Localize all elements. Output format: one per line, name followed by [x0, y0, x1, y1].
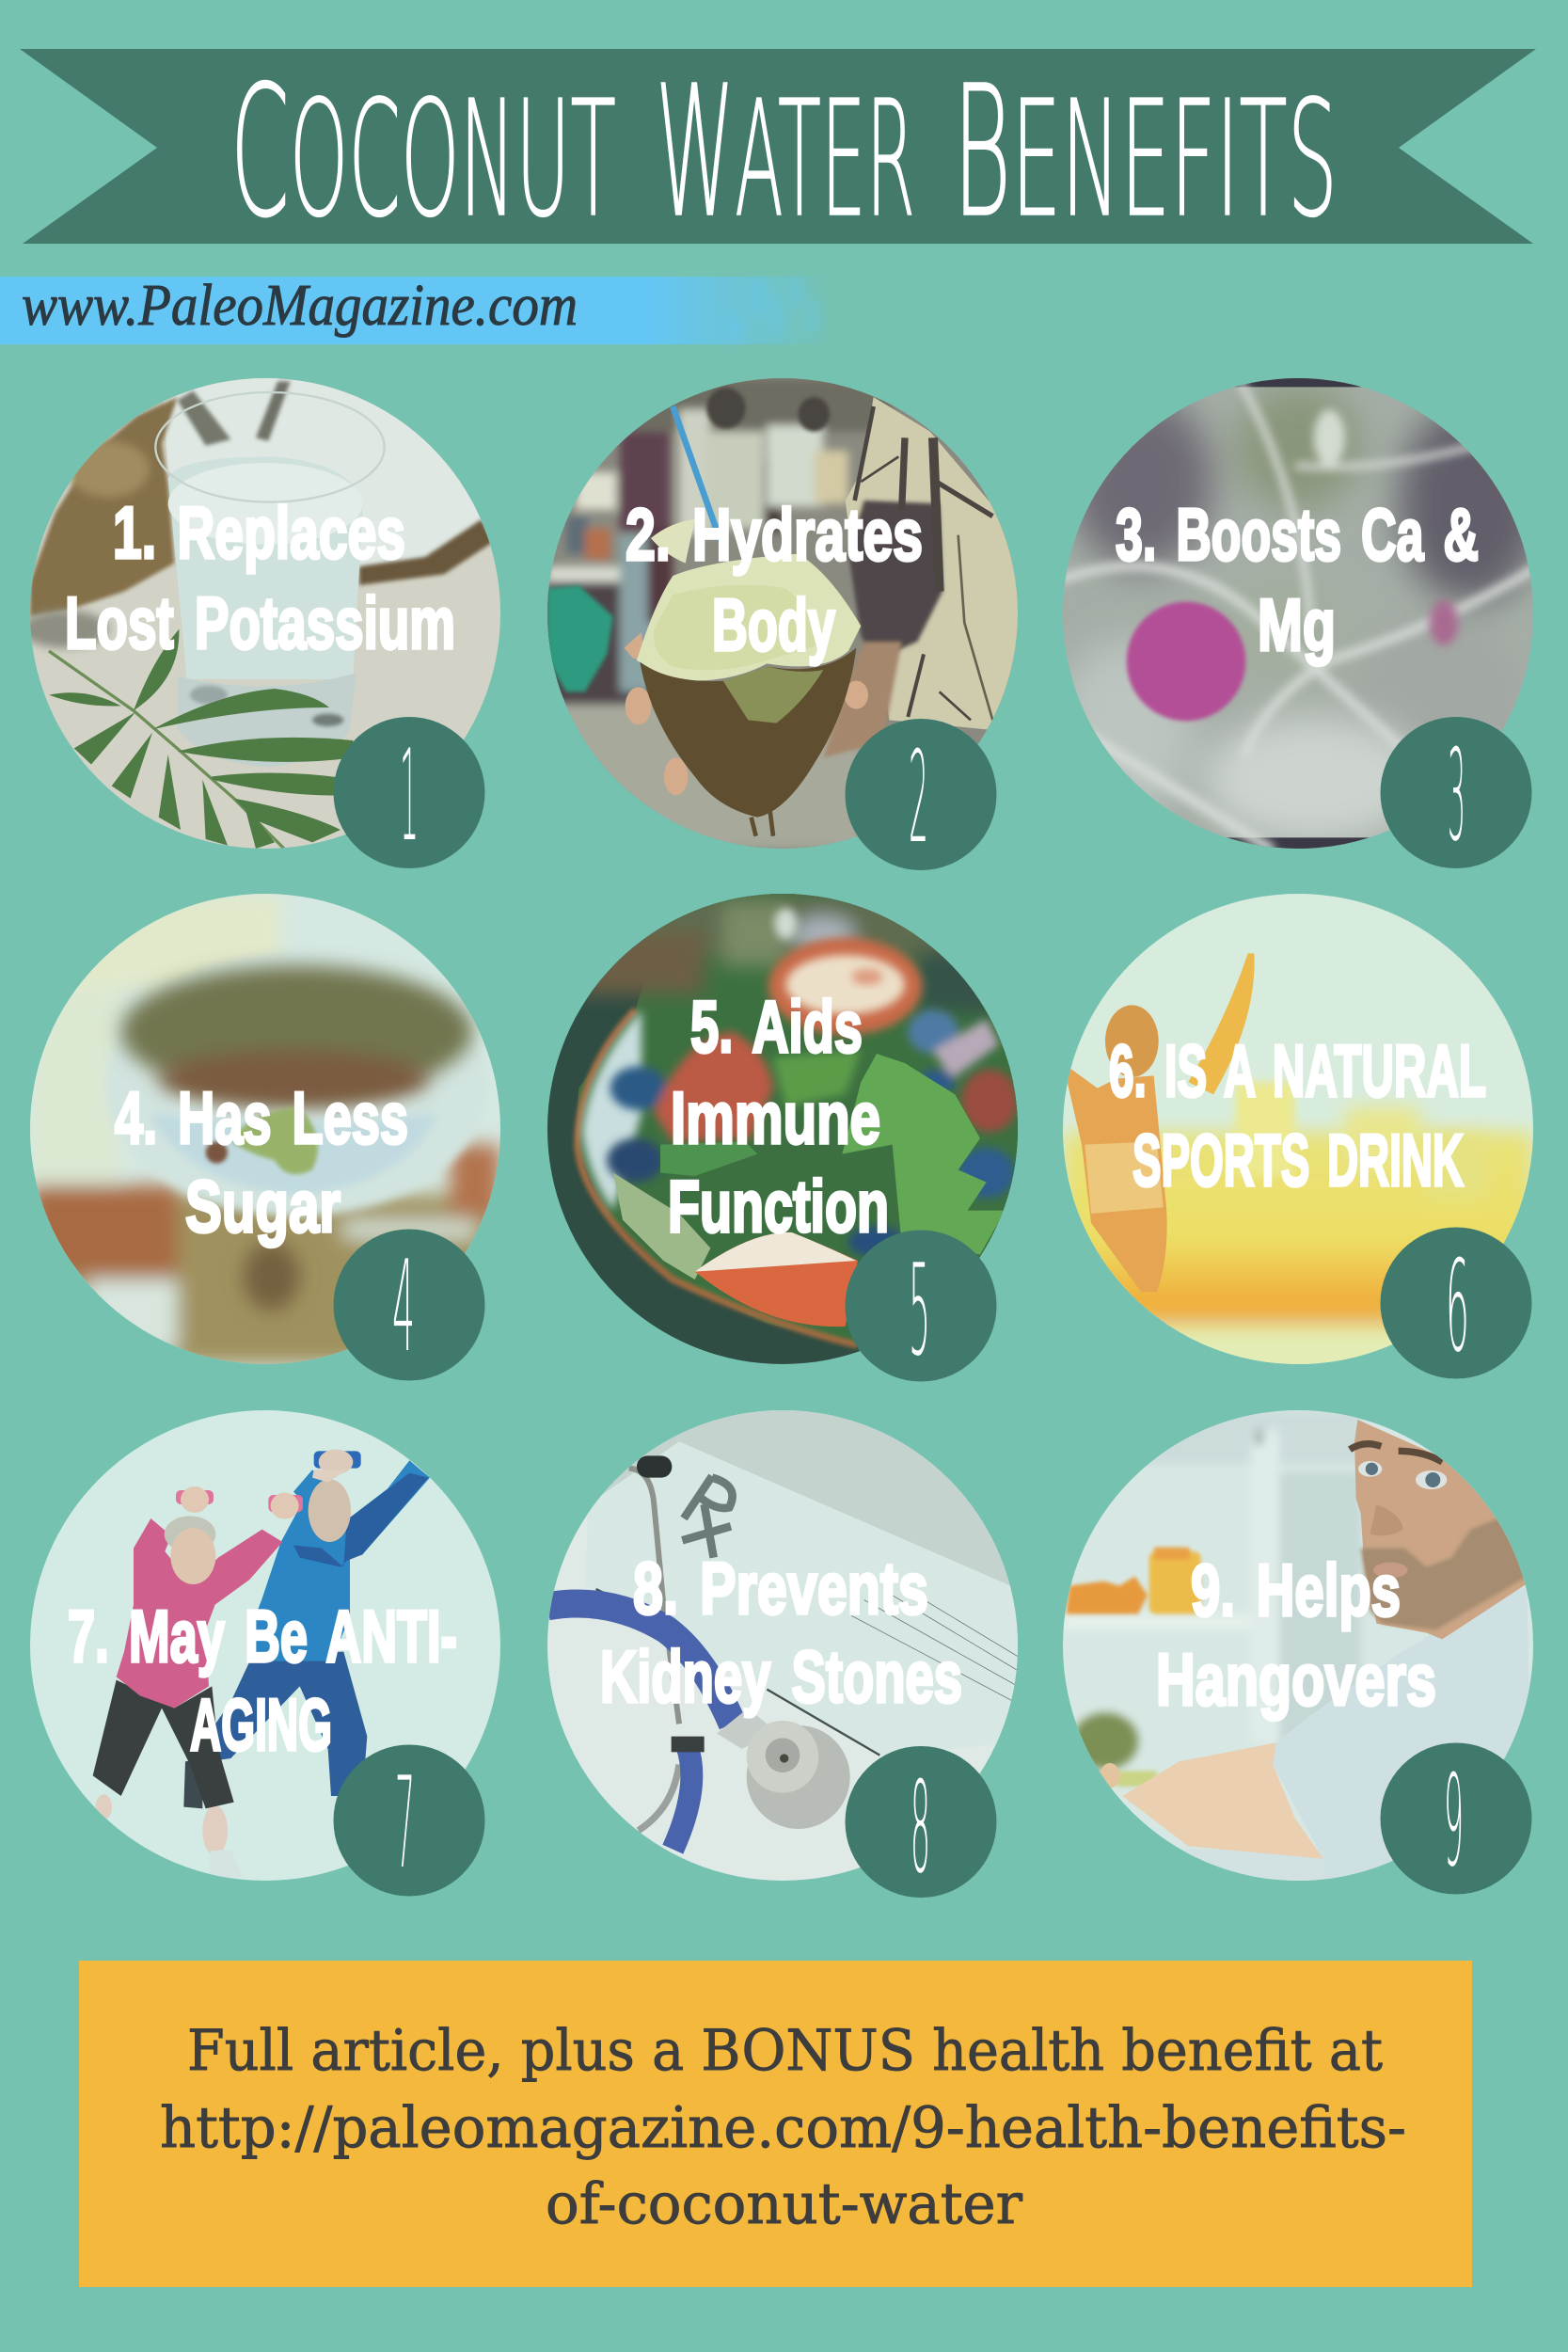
- title banner: [20, 48, 1536, 258]
- label: 4. Has Less: [115, 1076, 408, 1159]
- stethoscope: [629, 1469, 679, 1724]
- number badge: [845, 1231, 997, 1384]
- number badge: 3: [1448, 723, 1465, 869]
- hands: [625, 632, 642, 660]
- footer text: [160, 2018, 1406, 2237]
- number badge: [1381, 717, 1531, 869]
- benefit 7: [30, 1410, 500, 1897]
- coconut: [637, 554, 861, 680]
- title text: WATER: [656, 48, 915, 258]
- face: [1354, 1420, 1533, 1639]
- rx mark: [682, 1476, 733, 1558]
- number badge: [1381, 1227, 1531, 1380]
- photo: woman cheering at sunrise: [1063, 894, 1533, 1364]
- label: 7. May Be ANTI-: [68, 1595, 457, 1677]
- photo: stethoscope and prescription: [547, 1410, 1018, 1881]
- number badge: 6: [1446, 1233, 1469, 1380]
- shirt: [1273, 1586, 1533, 1881]
- woman top: [117, 1518, 282, 1708]
- top strawberry: [768, 938, 922, 1035]
- label: [65, 491, 455, 664]
- bottom strawberry: [695, 1232, 858, 1327]
- title text: COCONUT: [230, 48, 616, 258]
- label: Immune: [671, 1076, 880, 1159]
- number badge: 1: [400, 723, 419, 869]
- benefit 3: [1056, 378, 1543, 869]
- label: Sugar: [185, 1165, 341, 1248]
- number badge: [333, 1744, 485, 1897]
- label: 2. Hydrates: [626, 493, 923, 576]
- benefit 2: [547, 378, 1018, 871]
- website url: www.PaleoMagazine.com: [22, 274, 578, 338]
- photo: cup of tea: [30, 894, 500, 1364]
- label: Mg: [1258, 583, 1336, 666]
- label: Hangovers: [1156, 1638, 1436, 1721]
- number badge: 4: [392, 1233, 415, 1380]
- footer text: Full article, plus a BONUS health benefit at: [187, 2018, 1383, 2084]
- label: Lost Potassium: [65, 581, 455, 664]
- man trousers: [187, 1652, 367, 1796]
- label: [1116, 493, 1479, 666]
- number badge: 9: [1444, 1748, 1464, 1895]
- photo: pink flower: [1056, 378, 1543, 849]
- label: [1156, 1549, 1436, 1721]
- woman trousers and legs: [202, 1805, 228, 1855]
- label: [626, 493, 923, 666]
- benefit 9: [1063, 1410, 1533, 1895]
- man jacket: [253, 1460, 430, 1661]
- photo: coconut and glass: [21, 378, 500, 849]
- photo: salad bowl: [547, 894, 1018, 1364]
- label: 5. Aids: [690, 985, 863, 1068]
- number badge: [1381, 1742, 1531, 1895]
- title text: [230, 48, 1338, 258]
- plate rim: [578, 1009, 858, 1345]
- footer text: of-coconut-water: [546, 2171, 1022, 2237]
- benefit 1: [21, 378, 500, 869]
- number badge: 7: [395, 1750, 415, 1897]
- footer call-out: [79, 1961, 1472, 2287]
- label: 1. Replaces: [113, 491, 405, 574]
- label: [668, 985, 889, 1248]
- footer text: http://paleomagazine.com/9-health-benefits-: [160, 2095, 1406, 2161]
- number badge: 8: [911, 1755, 930, 1901]
- number badge: [333, 717, 485, 869]
- photo: man at the fridge: [1063, 1410, 1533, 1881]
- benefit 6: [1063, 894, 1533, 1380]
- benefit 8: [547, 1410, 1018, 1901]
- label: Function: [668, 1165, 889, 1248]
- label: 9. Helps: [1191, 1549, 1401, 1631]
- number badge: [845, 719, 997, 871]
- number badge: 5: [909, 1237, 930, 1384]
- benefit 5: [547, 894, 1018, 1384]
- label: Body: [712, 583, 835, 666]
- label: [115, 1076, 408, 1248]
- label: Kidney Stones: [600, 1635, 962, 1718]
- label: [68, 1595, 457, 1766]
- arm: [1122, 1742, 1323, 1859]
- shirt: [846, 397, 1018, 729]
- number badge: 2: [909, 724, 928, 871]
- number badge: [333, 1229, 485, 1381]
- benefit 4: [30, 894, 500, 1381]
- photo: peeled coconut at market: [547, 378, 1018, 849]
- flower: [1127, 602, 1245, 721]
- website strip: [0, 274, 835, 344]
- label: [1109, 1029, 1486, 1201]
- fruit on shelf: [1066, 1548, 1201, 1614]
- number badge: [845, 1746, 997, 1901]
- photo: seniors exercising: [30, 1410, 500, 1881]
- label: AGING: [190, 1683, 332, 1766]
- label: [600, 1547, 962, 1718]
- tree reflection: [230, 1107, 318, 1174]
- label: 8. Prevents: [633, 1547, 928, 1629]
